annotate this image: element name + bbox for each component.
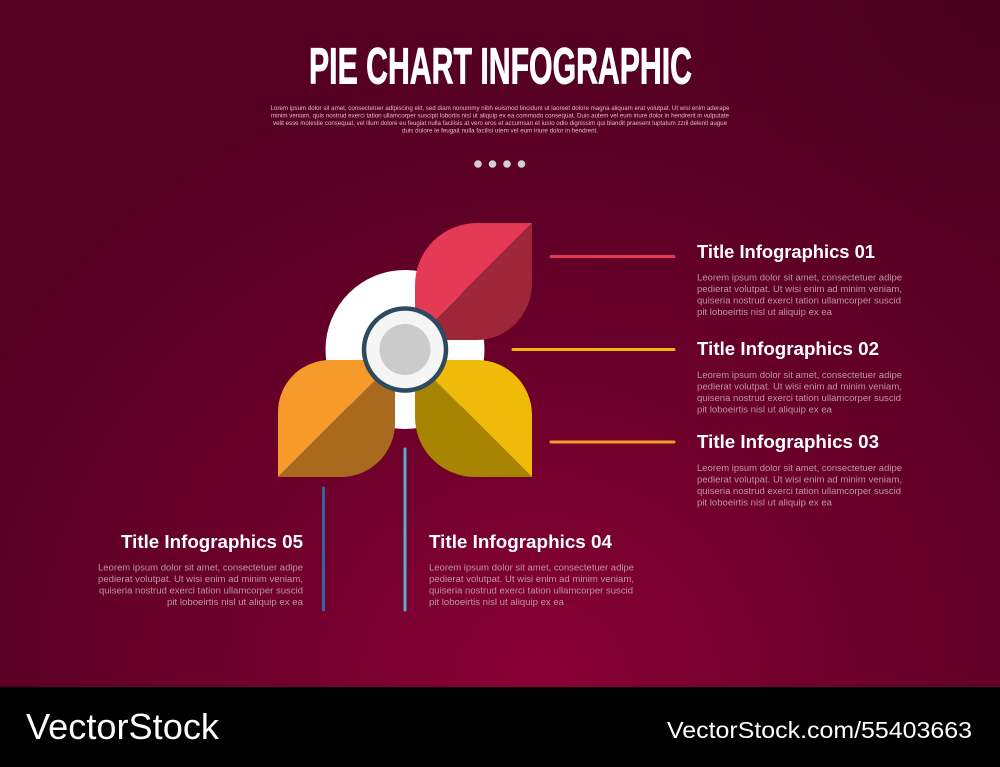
text block 01: quiseria nostrud exerci tation ullamcorper suscid — [697, 296, 901, 306]
text block 01: Leorem ipsum dolor sit amet, consectetuer adipe — [697, 272, 902, 284]
text block 05: Leorem ipsum dolor sit amet, consectetuer adipe — [98, 562, 303, 574]
intro text block: Lorem ipsum dolor sit amet, consectetuer adipiscing elit, sed diam nonummy nibh euismod tincidunt ut laoreet dolore magna aliquam erat volutpat. Ut wisi enim aderape — [270, 106, 730, 112]
text block 01: Title Infographics 01 — [697, 241, 875, 262]
text block 02: pit loboeirtis nisl ut aliquip ex ea — [697, 404, 833, 416]
text block 04: quiseria nostrud exerci tation ullamcorper suscid — [429, 586, 633, 596]
text block 02 — [697, 338, 902, 416]
text block 01: pit loboeirtis nisl ut aliquip ex ea — [697, 307, 833, 318]
intro text block: duis dolore te feugait nulla facilisi utem vel eum iriure dolor in hendrerit. — [402, 128, 598, 134]
text block 03: Title Infographics 03 — [697, 431, 879, 452]
intro text block: minim veniam, quis nostrud exerci tation ullamcorper suscipit lobortis nisl ut aliquip ex ea commodo consequat. Duis autem vel eum iriure dolor in hendrerit in vulputate — [271, 114, 730, 120]
connector: teal line — [404, 449, 406, 610]
text block 05: pit loboeirtis nisl ut aliquip ex ea — [167, 597, 304, 608]
pie chart flower — [278, 223, 532, 477]
text block 02: Title Infographics 02 — [697, 338, 879, 359]
title: PIE CHART INFOGRAPHIC — [309, 38, 692, 95]
center hub — [364, 308, 446, 390]
footer bar — [0, 687, 1000, 767]
text block 02: Leorem ipsum dolor sit amet, consectetuer adipe — [697, 370, 902, 381]
text block 04 — [429, 531, 634, 608]
connector: red line — [551, 255, 674, 258]
text block 05 — [98, 531, 304, 608]
text block 04: pit loboeirtis nisl ut aliquip ex ea — [429, 597, 565, 608]
connector: yellow line — [513, 348, 674, 351]
white base circle — [326, 270, 484, 429]
text block 03 — [697, 431, 902, 508]
text block 05: quiseria nostrud exerci tation ullamcorper suscid — [99, 586, 303, 596]
text block 05: Title Infographics 05 — [121, 531, 303, 552]
footer url: VectorStock.com/55403663 — [667, 717, 972, 743]
text block 04: pedierat volutpat. Ut wisi enim ad minim veniam, — [429, 574, 634, 585]
text block 03: pedierat volutpat. Ut wisi enim ad minim veniam, — [697, 474, 902, 486]
text block 03: pit loboeirtis nisl ut aliquip ex ea — [697, 498, 833, 508]
text block 01 — [697, 241, 902, 318]
text block 04: Title Infographics 04 — [429, 531, 613, 552]
intro text block: velit esse molestie consequat, vel illum dolore eu feugiat nulla facilisis at vero eros et accumsan et iusto odio dignissim qui blandit praesent luptatum zzril delenit augue — [273, 121, 728, 127]
leaf: red segment 01 — [415, 223, 532, 340]
connector: blue line — [322, 488, 325, 610]
text block 03: Leorem ipsum dolor sit amet, consectetuer adipe — [697, 463, 902, 474]
text block 01: pedierat volutpat. Ut wisi enim ad minim veniam, — [697, 284, 902, 295]
leaf: orange segment 03 — [278, 360, 395, 477]
connector: orange line — [551, 440, 674, 444]
text block 02: pedierat volutpat. Ut wisi enim ad minim veniam, — [697, 382, 902, 392]
intro text block — [270, 106, 730, 134]
text block 03: quiseria nostrud exerci tation ullamcorper suscid — [697, 486, 901, 497]
text block 04: Leorem ipsum dolor sit amet, consectetuer adipe — [429, 562, 634, 574]
pagination dots — [474, 160, 525, 168]
text block 02: quiseria nostrud exerci tation ullamcorper suscid — [697, 393, 901, 404]
footer logo: VectorStock — [26, 706, 220, 747]
leaf: yellow segment 02 — [415, 360, 532, 477]
text block 05: pedierat volutpat. Ut wisi enim ad minim veniam, — [98, 574, 303, 585]
